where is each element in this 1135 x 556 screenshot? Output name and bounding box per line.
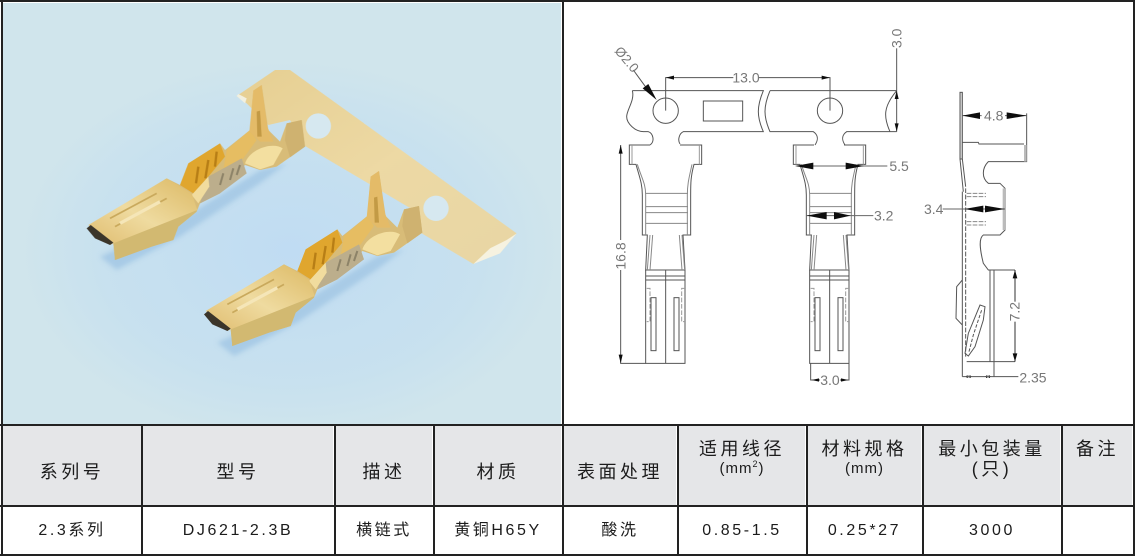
dimension 7.2 xyxy=(1006,270,1022,362)
terminal, rear xyxy=(87,85,305,270)
dimension 5.5 xyxy=(795,158,909,174)
right terminal outline xyxy=(793,145,866,363)
dimension 3.0 terminal width: 3.0 xyxy=(820,372,840,388)
dimension 13.0 xyxy=(666,70,830,111)
specification table: DJ621-2.3B xyxy=(183,522,293,539)
panel: product photo xyxy=(3,3,561,424)
specification table: (mm) xyxy=(845,460,884,477)
dimension 16.8 xyxy=(612,145,646,363)
dimension 4.8: 4.8 xyxy=(984,108,1004,124)
specification table: 0.25*27 xyxy=(828,522,901,539)
dimension 3.2: 3.2 xyxy=(874,208,894,224)
specification table: 2.3系列 xyxy=(38,522,106,539)
side view outline xyxy=(956,92,1027,377)
dimension 3.0 terminal width xyxy=(811,363,849,388)
specification table: 适用线径 xyxy=(699,439,785,459)
dimension 3.2 xyxy=(807,208,894,224)
panel: dimension drawing xyxy=(565,3,1133,424)
dimension 3.4: 3.4 xyxy=(924,201,944,217)
specification table: 备注 xyxy=(1076,439,1119,459)
terminal, front xyxy=(204,171,422,356)
dimension 5.5: 5.5 xyxy=(889,158,909,174)
specification table: 0.85-1.5 xyxy=(702,522,782,539)
front view strip xyxy=(627,91,897,145)
specification table: 表面处理 xyxy=(577,462,663,482)
dimension 4.8 xyxy=(962,108,1027,124)
dimension 2.35 xyxy=(962,370,1047,386)
dimension 7.2: 7.2 xyxy=(1006,302,1022,321)
dimension diameter 2.0: Ø2.0 xyxy=(612,44,642,75)
specification table: 3000 xyxy=(969,522,1015,539)
specification table: 系列号 xyxy=(40,462,104,482)
specification table: (只) xyxy=(972,459,1012,479)
specification table: 材质 xyxy=(476,462,520,482)
specification table: 材料规格 xyxy=(822,439,908,459)
dimension diameter 2.0 xyxy=(612,44,657,100)
carrier strip xyxy=(237,70,517,264)
specification table xyxy=(3,426,1132,539)
specification table: 黄铜H65Y xyxy=(454,522,542,539)
specification table: 酸洗 xyxy=(601,522,639,539)
dimension 13.0: 13.0 xyxy=(732,70,760,86)
dimension 16.8: 16.8 xyxy=(612,242,628,270)
specification table: 横链式 xyxy=(356,522,412,539)
dimension 3.0 strip width: 3.0 xyxy=(888,28,904,48)
dimension 3.0 strip width xyxy=(888,28,904,132)
specification table: (mm2) xyxy=(719,459,764,477)
specification table: 描述 xyxy=(362,462,406,482)
dimension 3.4 xyxy=(924,201,1005,217)
dimension 2.35: 2.35 xyxy=(1019,370,1047,386)
specification table: 型号 xyxy=(216,462,260,482)
specification table: 最小包装量 xyxy=(938,439,1046,459)
left terminal outline xyxy=(629,145,702,363)
